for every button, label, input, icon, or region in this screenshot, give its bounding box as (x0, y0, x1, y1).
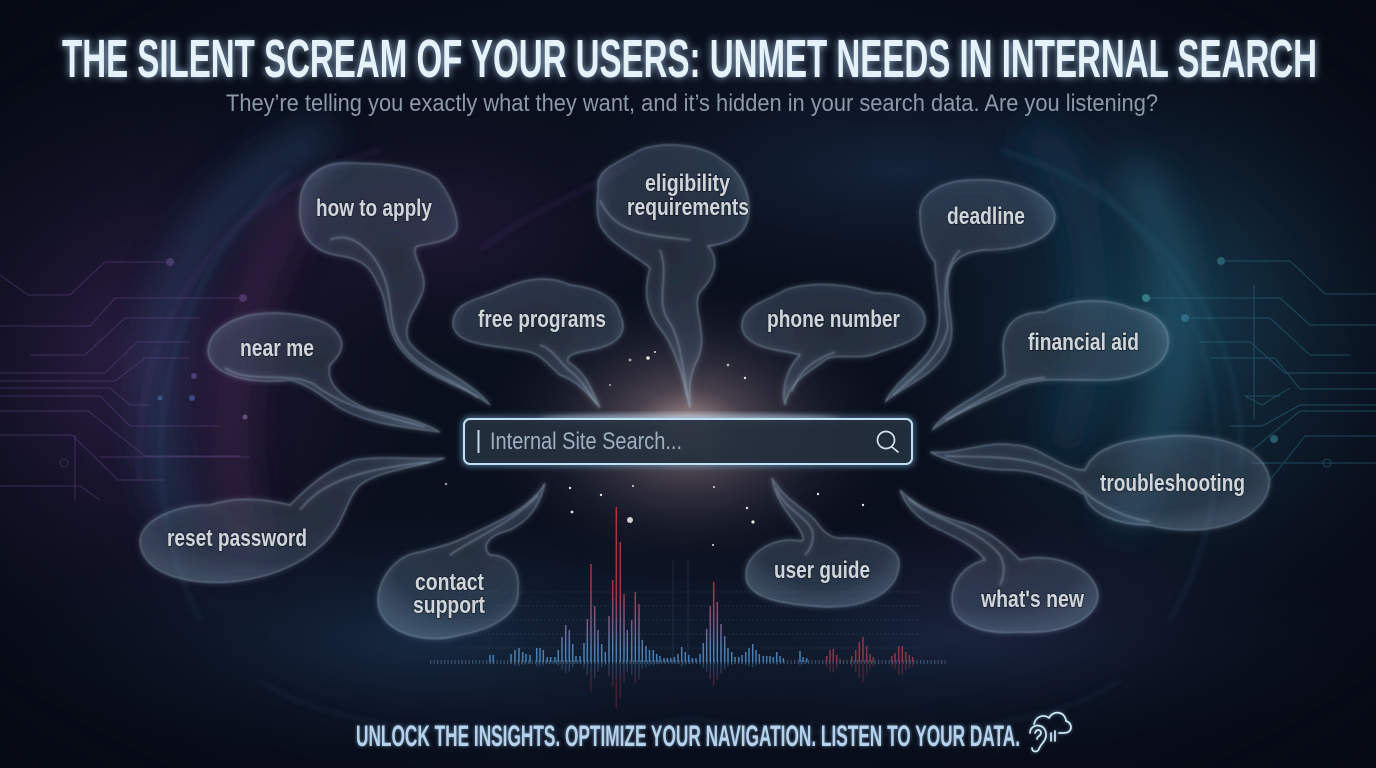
waveform chart (430, 507, 948, 708)
cloud: reset password: reset password (167, 525, 307, 552)
cloud: what's new (900, 490, 1098, 633)
subtitle: They’re telling you exactly what they want, and it’s hidden in your search data. Are you listening? (226, 90, 1158, 117)
waveform grid (460, 560, 920, 662)
center glow (478, 280, 898, 580)
cloud: deadline (885, 180, 1055, 402)
cloud: free programs (453, 279, 623, 408)
cloud: what's new: what's new (980, 586, 1084, 613)
cloud: near me (208, 313, 440, 432)
cloud: deadline: deadline (947, 203, 1025, 230)
icon: ear with cloud (1030, 713, 1071, 752)
cloud: eligibility requirements: eligibility (645, 170, 731, 197)
icon: magnifier (878, 432, 898, 452)
cloud: contact support: contact (415, 569, 484, 596)
cloud: troubleshooting: troubleshooting (1100, 470, 1245, 497)
left circuit lines (0, 258, 250, 500)
search bar (464, 414, 912, 464)
cloud: financial aid: financial aid (1028, 329, 1139, 356)
search cursor (478, 430, 480, 453)
cloud: phone number: phone number (767, 306, 900, 333)
cloud: free programs: free programs (478, 306, 606, 333)
cloud: eligibility requirements: requirements (627, 194, 749, 221)
cloud: how to apply: how to apply (316, 195, 433, 222)
cloud: user guide (746, 478, 899, 607)
cloud: contact support (378, 483, 545, 639)
cloud: user guide: user guide (774, 557, 870, 584)
cloud: phone number (742, 284, 925, 405)
cloud: reset password (140, 458, 445, 583)
cloud: near me: near me (240, 335, 314, 362)
cloud: how to apply (300, 163, 490, 405)
background stars (445, 351, 864, 546)
cloud: contact support: support (413, 592, 485, 619)
cloud: financial aid (932, 301, 1168, 430)
cloud: eligibility requirements (597, 145, 749, 408)
cloud: troubleshooting (930, 436, 1269, 530)
search placeholder: Internal Site Search... (490, 428, 682, 455)
right circuit lines (1142, 257, 1376, 480)
